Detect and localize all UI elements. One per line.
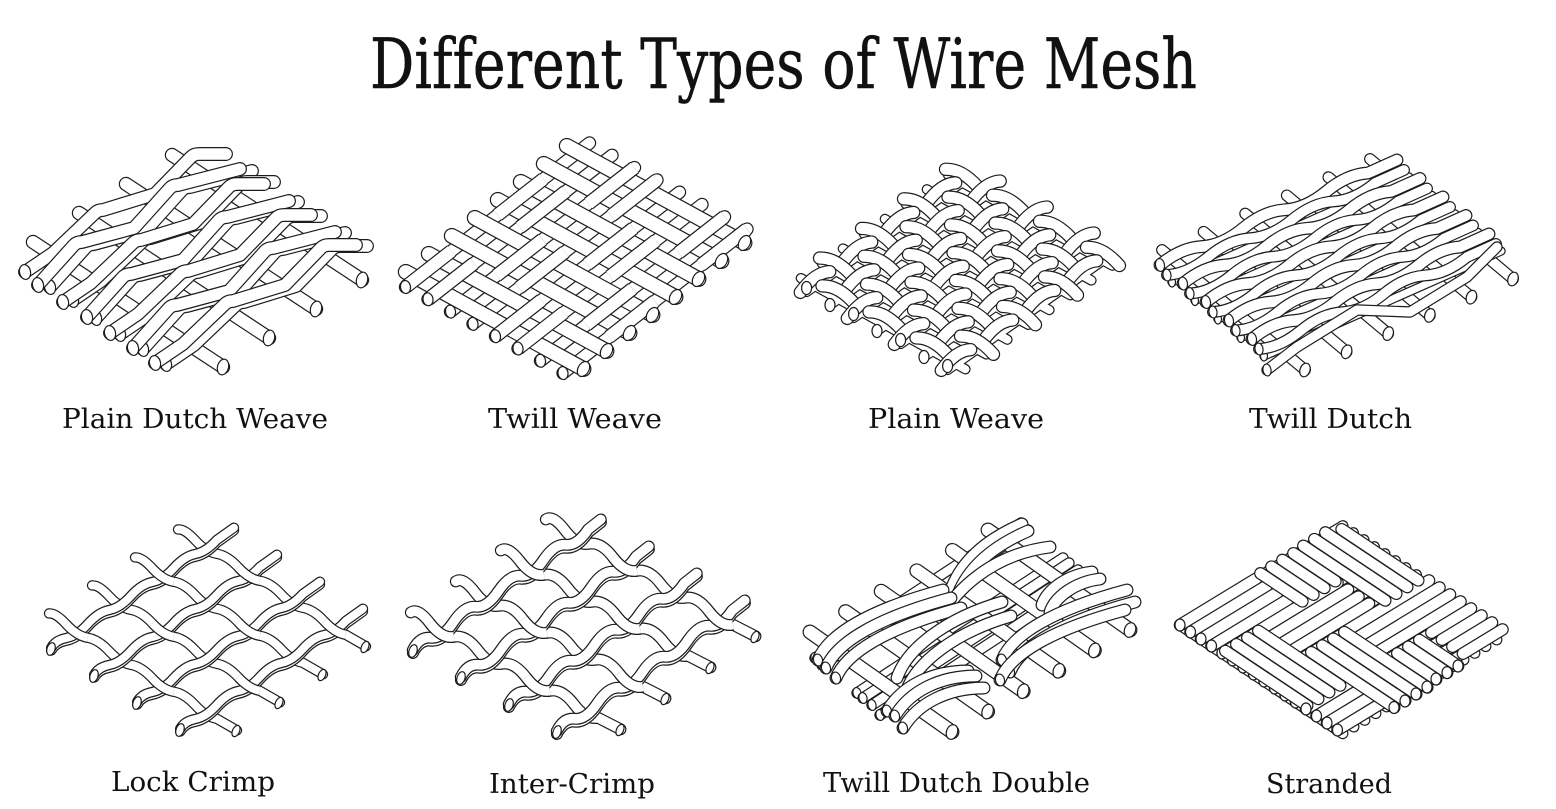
label: lock crimp: Lock Crimp — [111, 767, 275, 798]
mesh: twill dutch double — [810, 523, 1138, 741]
mesh: twill weave — [394, 137, 756, 380]
mesh: lock crimp — [21, 511, 394, 749]
label: twill dutch: Twill Dutch — [1249, 404, 1412, 435]
label: stranded: Stranded — [1266, 769, 1392, 800]
label: inter-crimp: Inter-Crimp — [489, 769, 655, 800]
label: twill weave: Twill Weave — [488, 404, 662, 435]
mesh: stranded — [1175, 522, 1512, 736]
mesh: plain dutch weave — [18, 154, 369, 376]
label: plain weave: Plain Weave — [868, 404, 1044, 435]
title: Different Types of Wire Mesh — [370, 25, 1197, 105]
label: twill dutch double: Twill Dutch Double — [823, 768, 1090, 799]
label: plain dutch weave: Plain Dutch Weave — [62, 404, 328, 435]
mesh: plain weave — [784, 159, 1134, 379]
mesh: inter-crimp — [379, 502, 779, 752]
mesh: twill dutch — [1154, 159, 1520, 378]
